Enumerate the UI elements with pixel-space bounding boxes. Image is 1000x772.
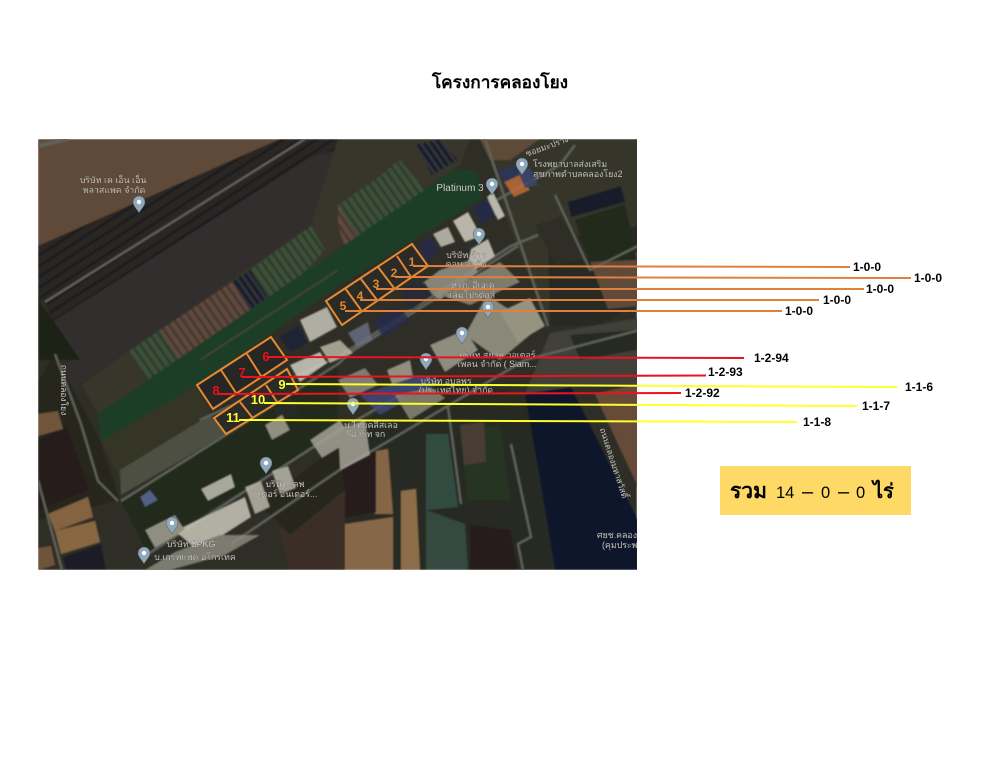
orange plot numbers: 5 <box>340 299 347 313</box>
map place labels: ซอยมะปราง <box>524 134 570 159</box>
map place labels: บริษัท ช้าง <box>446 250 486 260</box>
map place labels: บริษัท เคพ <box>265 479 305 489</box>
map place labels: พลาสแพค จำกัด <box>83 185 145 195</box>
red leader lines <box>218 357 744 394</box>
orange leader lines <box>345 266 911 311</box>
red plot numbers: 8 <box>212 383 220 398</box>
orange plot numbers: 3 <box>373 277 380 291</box>
map place labels: แล้มโปรดักส์ <box>447 290 496 300</box>
plot area values: 1-0-0 <box>785 304 813 318</box>
map place labels: รีอาร์ท จก <box>347 429 385 439</box>
map place labels <box>59 134 651 562</box>
red plot numbers: 6 <box>262 349 270 364</box>
map pin centres <box>137 162 524 555</box>
total callout: ไร่ <box>871 479 894 503</box>
yellow plot numbers: 10 <box>251 392 265 407</box>
map place labels: บ.เกรทแพค อโกรเทค <box>154 552 236 562</box>
map place labels: คอน จำกัด <box>446 259 487 269</box>
total callout: 0 <box>856 484 865 502</box>
plot area values: 1-0-0 <box>914 271 942 285</box>
plot area values <box>685 260 942 429</box>
total callout: รวม <box>730 480 767 503</box>
orange plot numbers: 2 <box>391 266 398 280</box>
map place labels: โรงพยาบาลส่งเสริม <box>533 159 607 169</box>
plot area values: 1-2-94 <box>754 351 789 365</box>
orange plot numbers: 4 <box>357 289 364 303</box>
map place labels: Platinum 3 <box>436 183 484 194</box>
roads <box>38 139 640 570</box>
map place labels: เตอร์ อินเตอร์... <box>259 489 317 499</box>
satellite map <box>38 134 651 570</box>
total callout: 0 <box>821 484 830 502</box>
map place labels: (คุมประพฤติ) <box>602 540 651 551</box>
plot area values: 1-2-93 <box>708 365 743 379</box>
map place labels: ถนนคลองโยง <box>59 365 69 415</box>
plots 1 to 5 outline <box>326 244 428 325</box>
plot area values: 1-1-8 <box>803 415 831 429</box>
map pins <box>133 158 528 564</box>
title: โครงการคลองโยง <box>431 71 568 92</box>
map place labels: สุขภาพตำบลคลองโยง2 <box>533 169 623 180</box>
map place labels: (ประเทศไทย) จำกัด <box>419 385 493 395</box>
map place labels: บริษัท SPKG <box>167 539 216 549</box>
red plot numbers: 7 <box>238 365 246 380</box>
orange plot numbers: 1 <box>409 255 416 269</box>
yellow plot numbers <box>226 380 286 422</box>
map place labels: ศยช.คลองโยง <box>597 530 651 540</box>
map place labels: หจก. อีเอเค <box>451 280 495 290</box>
map place labels: บริษัท เค เอ็น เอ็น <box>80 174 146 185</box>
yellow leader lines <box>239 384 897 422</box>
map place labels: บริษัท สยาม วอเตอร์ <box>458 350 536 360</box>
buildings <box>140 165 545 570</box>
plot area values: 1-1-6 <box>905 380 933 394</box>
total callout: – <box>838 481 850 503</box>
plots 6 to 8 outline <box>197 337 287 409</box>
total callout: – <box>802 481 814 503</box>
yellow plot numbers: 11 <box>226 410 240 425</box>
plot area values: 1-2-92 <box>685 386 720 400</box>
map terrain <box>38 139 640 570</box>
yellow plot numbers: 9 <box>278 377 286 392</box>
orange plot numbers <box>340 258 415 310</box>
plot area values: 1-0-0 <box>866 282 894 296</box>
plot area values: 1-0-0 <box>823 293 851 307</box>
plot area values: 1-0-0 <box>853 260 881 274</box>
map place labels: บ.ไทยคลีสเลอ <box>344 420 398 430</box>
red plot numbers <box>212 352 270 395</box>
plots 9 to 11 outline <box>214 369 298 434</box>
map place labels: เพลน จำกัด ( Siam... <box>458 359 536 369</box>
total callout <box>720 466 911 515</box>
map place labels: บริษัท อุบลพร <box>420 376 472 387</box>
total callout: 14 <box>776 484 794 502</box>
plot area values: 1-1-7 <box>862 399 890 413</box>
map place labels: ถนนคลองมหาสวัสดิ์ <box>598 426 631 501</box>
